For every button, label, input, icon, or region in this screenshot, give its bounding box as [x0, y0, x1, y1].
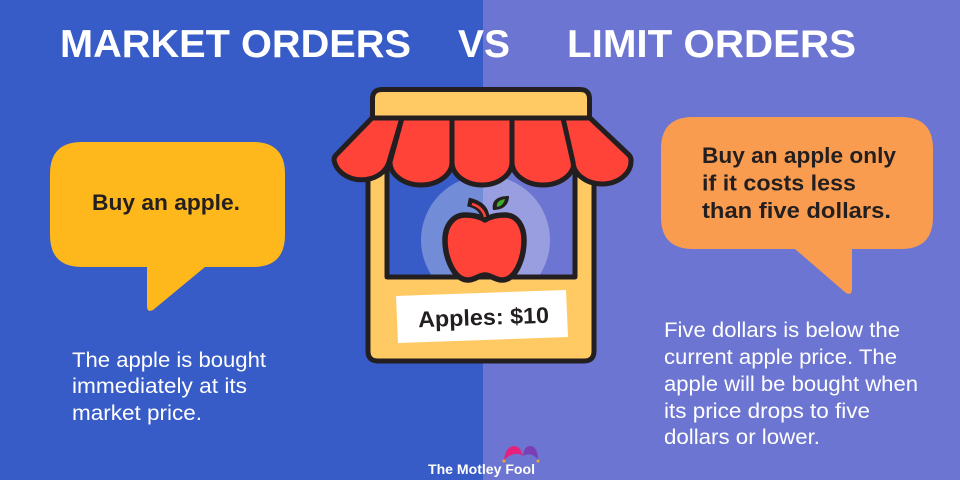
- window glow circle: [421, 179, 550, 274]
- text block: market order explanation: [72, 348, 266, 425]
- heading: vs: VS: [458, 23, 510, 66]
- speech bubble: limit order: [661, 117, 933, 294]
- panel: limit orders background: [483, 0, 960, 480]
- heading: limit orders: LIMIT ORDERS: [567, 23, 856, 66]
- awning: [334, 118, 631, 185]
- store window right half: [483, 150, 575, 277]
- apple leaf: [493, 196, 509, 210]
- icon: jester hat: [502, 446, 540, 462]
- panel: market orders background: [0, 0, 483, 480]
- speech bubble: market order: [50, 142, 285, 311]
- apple stem: [468, 202, 485, 219]
- text block: limit order explanation: dollars or lower.: [664, 425, 820, 449]
- speech bubble: limit order: than five dollars.: [702, 198, 891, 223]
- text block: market order explanation: The apple is bought: [72, 348, 266, 372]
- text block: market order explanation: market price.: [72, 401, 202, 425]
- apple leaf green: [497, 199, 505, 207]
- store body: [368, 170, 594, 361]
- icon: apple store: [334, 90, 631, 361]
- text block: limit order explanation: its price drops to five: [664, 399, 870, 423]
- speech bubble: limit order: Buy an apple only: [702, 143, 896, 168]
- speech bubble: limit order: if it costs less: [702, 170, 856, 196]
- text block: limit order explanation: Five dollars is below the: [664, 318, 900, 342]
- text block: limit order explanation: current apple price. The: [664, 345, 897, 369]
- store sign board: [372, 90, 590, 118]
- apple: [445, 215, 524, 280]
- apple stem highlight: [472, 204, 485, 217]
- text block: market order explanation: immediately at its: [72, 374, 247, 398]
- window frame: [387, 150, 575, 277]
- price tag: Apples: $10: [418, 303, 549, 332]
- heading: market orders: MARKET ORDERS: [60, 23, 411, 66]
- logo: the motley fool: [428, 446, 540, 477]
- store window: [387, 150, 483, 277]
- speech bubble: market order: Buy an apple.: [92, 190, 240, 215]
- logo: the motley fool: The Motley Fool: [428, 461, 535, 477]
- price tag: [396, 290, 568, 343]
- text block: limit order explanation: apple will be bought when: [664, 372, 918, 396]
- text block: limit order explanation: [664, 318, 918, 449]
